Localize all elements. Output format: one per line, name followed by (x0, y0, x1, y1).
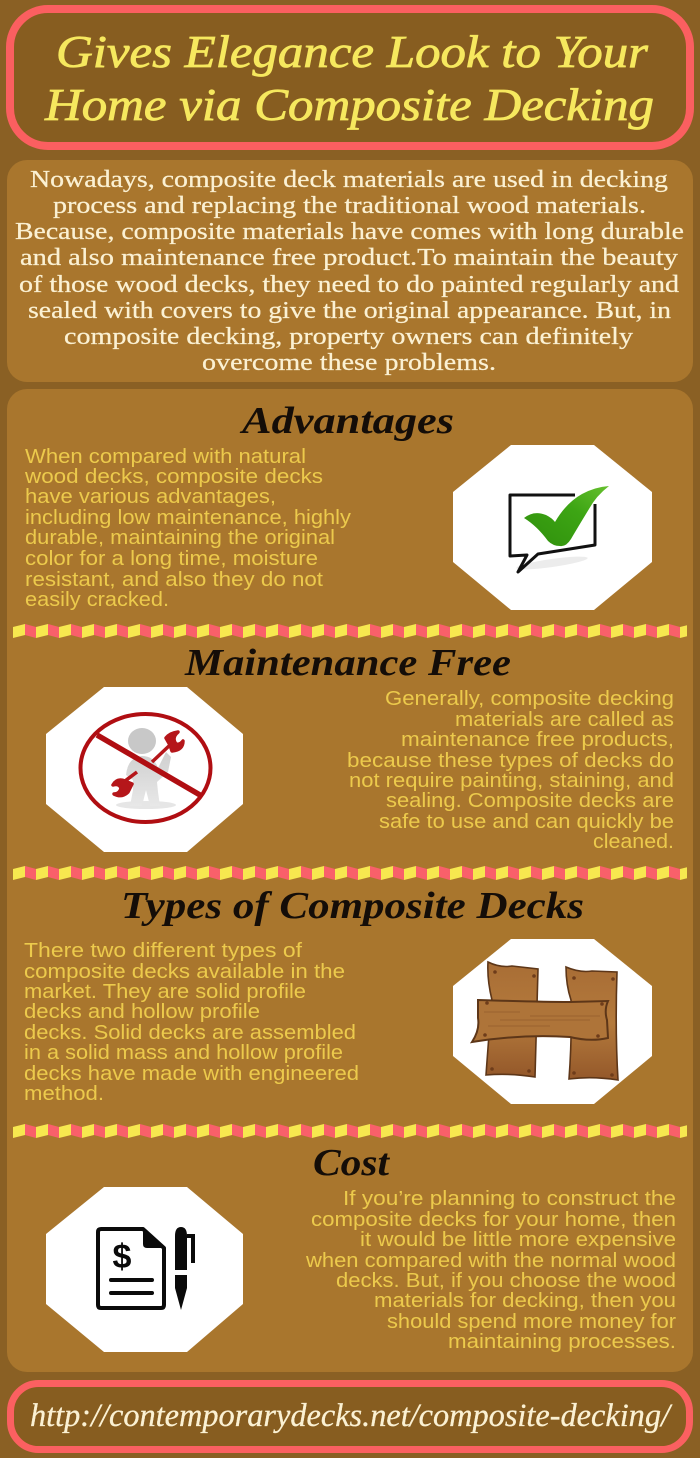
title: Home via Composite Decking (44, 79, 654, 130)
text: types: method. (24, 1083, 104, 1105)
text: types: decks have made with engineered (24, 1063, 359, 1085)
intro text: overcome these problems. (202, 350, 496, 376)
text: cost: should spend more money for (387, 1311, 676, 1333)
icon: invoice and pen: $ (113, 1238, 132, 1276)
text: cost: decks. But, if you choose the wood (336, 1270, 676, 1292)
text: maintenance free: because these types of decks do (347, 750, 674, 772)
title (44, 26, 654, 130)
divider 1 (13, 624, 687, 638)
text: types: There two different types of (24, 940, 303, 962)
heading: maintenance free: Maintenance Free (184, 642, 511, 684)
text: types (24, 940, 359, 1105)
panel: main content (7, 389, 693, 1372)
intro text: Nowadays, composite deck materials are used in decking (30, 167, 668, 193)
text: advantages: durable, maintaining the original (25, 527, 335, 549)
text: advantages (24, 446, 351, 611)
text: cost: If you’re planning to construct the (343, 1188, 676, 1210)
text: maintenance free: safe to use and can quickly be (379, 811, 674, 833)
divider 2 (13, 866, 687, 880)
section: maintenance free (46, 642, 674, 853)
text: types: in a solid mass and hollow profile (24, 1042, 343, 1064)
intro text: Because, composite materials have comes with long durable (15, 219, 684, 245)
title: Gives Elegance Look to Your (56, 26, 649, 77)
text: cost: composite decks for your home, then (311, 1209, 676, 1231)
text: advantages: wood decks, composite decks (24, 466, 323, 488)
text: advantages: resistant, and also they do not (25, 569, 323, 591)
section: advantages (24, 400, 652, 611)
text: advantages: have various advantages, (25, 486, 276, 508)
text: cost: maintaining processes. (448, 1331, 676, 1353)
text: advantages: easily cracked. (25, 589, 169, 611)
text: types: composite decks available in the (24, 961, 345, 983)
icon: check mark in speech bubble (453, 445, 652, 610)
text: cost: it would be little more expensive (360, 1229, 676, 1251)
intro text: sealed with covers to give the original appearance. But, in (28, 298, 671, 324)
panel: introduction (7, 160, 693, 382)
text: maintenance free: sealing. Composite decks are (386, 790, 674, 812)
text: maintenance free: not require painting, staining, and (349, 770, 674, 792)
section: cost (46, 1142, 676, 1353)
text: advantages: color for a long time, moisture (25, 548, 318, 570)
icon: wooden planks (453, 939, 652, 1104)
text: maintenance free: maintenance free products, (401, 729, 674, 751)
text: types: market. They are solid profile (24, 981, 306, 1003)
section: types of composite decks (24, 885, 652, 1105)
text: cost: when compared with the normal wood (305, 1250, 676, 1272)
text: maintenance free (347, 688, 674, 853)
url: http://contemporarydecks.net/composite-decking/ (30, 1398, 673, 1434)
text: maintenance free: materials are called as (455, 709, 674, 731)
heading: advantages: Advantages (240, 400, 454, 442)
text: cost: materials for decking, then you (374, 1290, 676, 1312)
heading: cost: Cost (313, 1142, 391, 1184)
text: types: decks and hollow profile (24, 1001, 260, 1023)
text: advantages: including low maintenance, highly (25, 507, 351, 529)
icon: no wrench repair (46, 687, 243, 852)
heading: types of composite decks: Types of Composite Decks (121, 885, 584, 927)
text: advantages: When compared with natural (25, 446, 306, 468)
intro text: composite decking, property owners can definitely (64, 324, 633, 350)
text: types: decks. Solid decks are assembled (24, 1022, 356, 1044)
intro text: of those wood decks, they need to do painted regularly and (19, 272, 679, 298)
divider 3 (13, 1124, 687, 1138)
footer url banner (10, 1384, 690, 1450)
intro text: process and replacing the traditional wood materials. (53, 193, 646, 219)
text: cost (305, 1188, 676, 1353)
text: maintenance free: cleaned. (593, 831, 674, 853)
intro text (15, 167, 684, 376)
text: maintenance free: Generally, composite decking (385, 688, 674, 710)
title banner (10, 9, 690, 146)
intro text: and also maintenance free product.To maintain the beauty (20, 245, 678, 271)
icon: invoice and pen (46, 1187, 243, 1352)
